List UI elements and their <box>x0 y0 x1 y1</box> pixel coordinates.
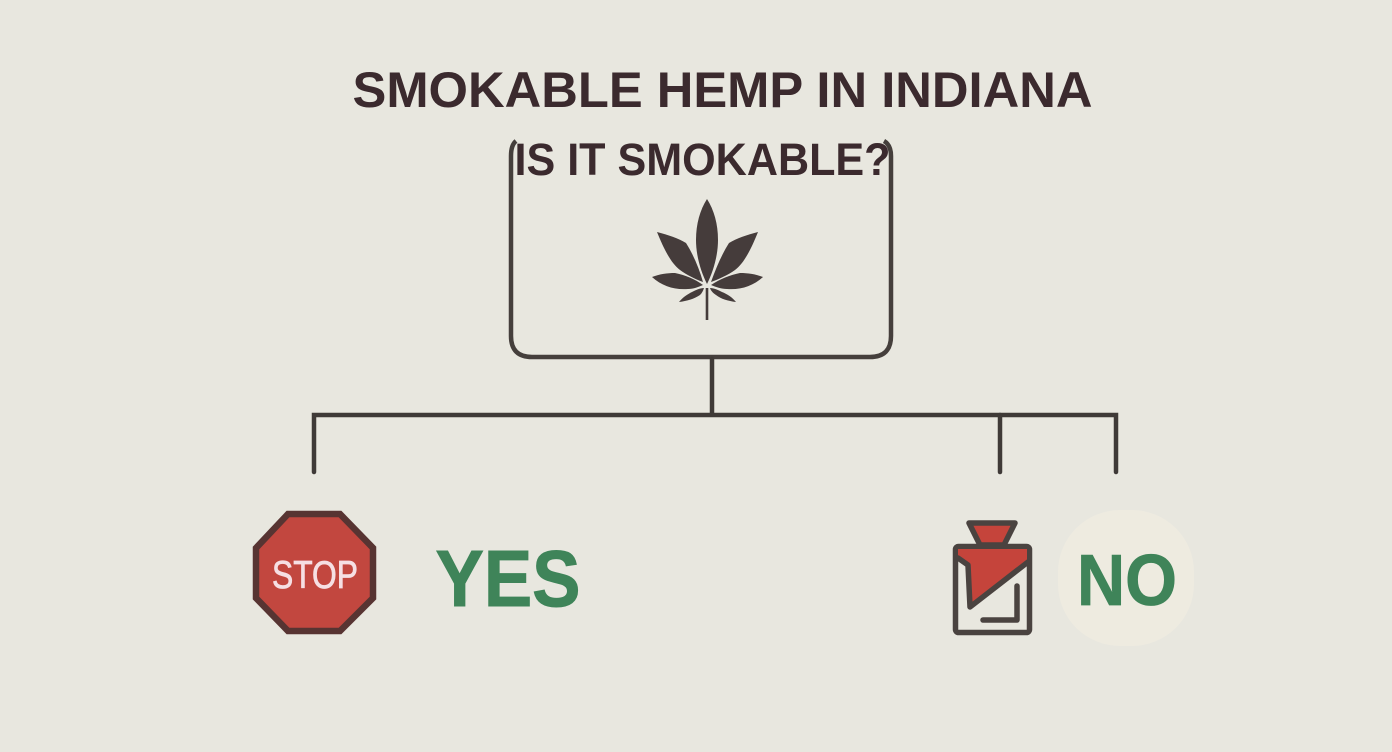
stop label: STOP <box>272 554 358 597</box>
question box <box>511 141 891 357</box>
no label: NO <box>1077 541 1177 621</box>
decision tree connectors <box>314 359 1116 472</box>
icon: package <box>956 523 1030 632</box>
no label highlight <box>1058 510 1194 646</box>
question heading: IS IT SMOKABLE? <box>514 134 890 185</box>
icon: stop sign <box>256 514 373 631</box>
icon: hemp leaf <box>652 199 763 320</box>
yes label: YES <box>436 534 580 623</box>
title: SMOKABLE HEMP IN INDIANA <box>352 62 1092 118</box>
